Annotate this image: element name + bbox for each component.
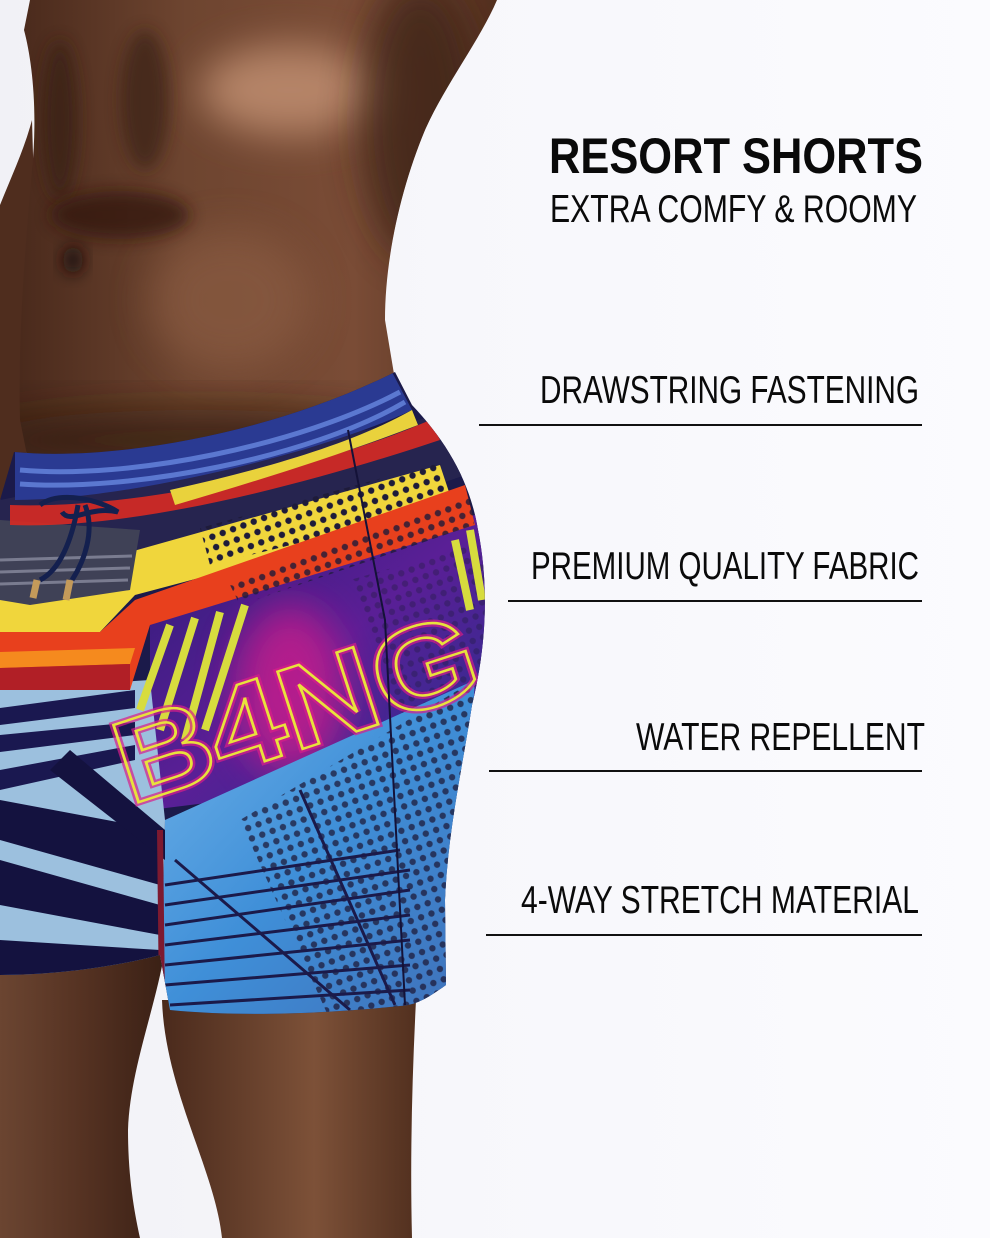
- rainbow band: orange red: [0, 485, 475, 690]
- purple panel halftone: [353, 548, 485, 713]
- rainbow band: navy base: [0, 418, 462, 550]
- torso shading: [0, 0, 480, 470]
- drawstring metal tips: [33, 580, 70, 600]
- left thigh: [0, 950, 165, 1238]
- B4NG neon lettering: B4NG: [97, 588, 495, 830]
- waistband: [15, 372, 412, 500]
- shorts: [0, 360, 500, 1030]
- horizontal lines on blue panel: [165, 790, 410, 1010]
- side panel: blue: [160, 680, 475, 1020]
- right thigh: [162, 1000, 416, 1238]
- drawstring: [40, 497, 118, 580]
- neon vertical stripes: [140, 530, 482, 740]
- pink glow: [235, 605, 345, 775]
- side panel: purple: [150, 510, 490, 810]
- side seam: [348, 430, 405, 1005]
- torso: [20, 0, 497, 470]
- B4NG neon lettering: B4NG: [97, 588, 495, 830]
- pocket grey panel: [0, 520, 140, 605]
- left arm: [0, 120, 40, 500]
- rainbow band: yellow: [0, 465, 455, 632]
- front panel: navy and light blue stripes: [0, 680, 165, 975]
- title block: [549, 128, 923, 231]
- heading: RESORT SHORTS: [549, 128, 923, 184]
- model figure wearing patterned shorts: [0, 0, 500, 1238]
